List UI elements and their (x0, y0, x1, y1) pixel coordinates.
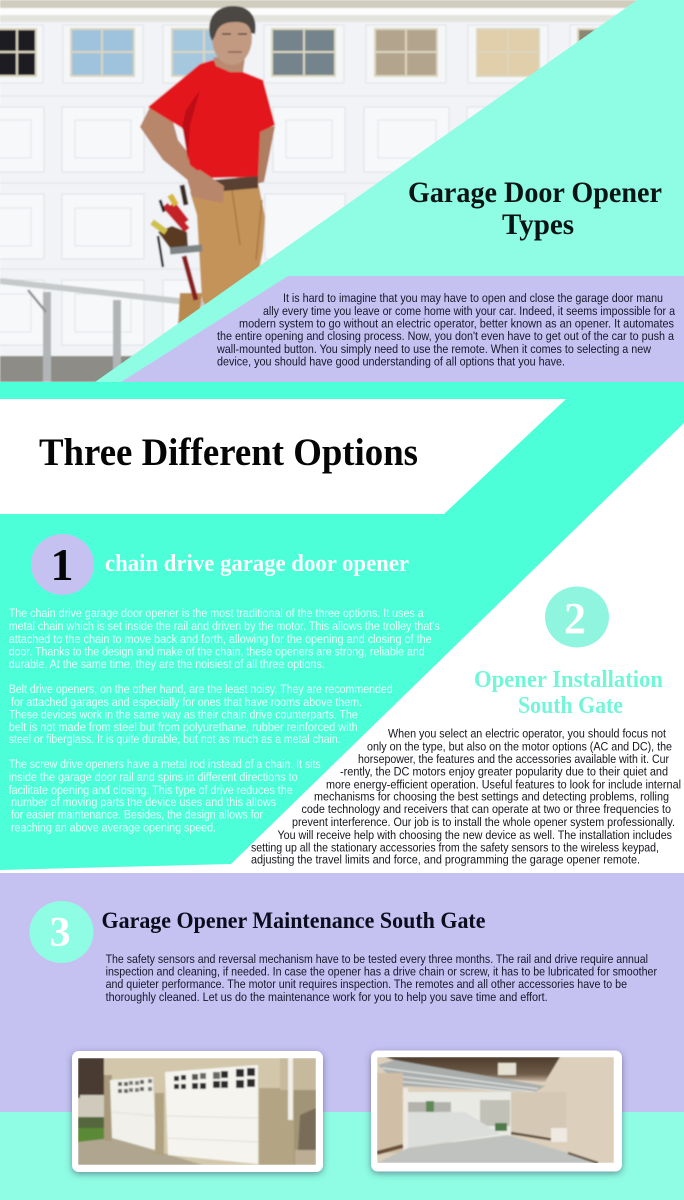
text block: chain, belt and screw drive descriptions: metal chain which is set inside the rail and driven by the motor. This allows the trolley that's (9, 619, 440, 633)
number badge 3 (30, 901, 94, 963)
panel: mint title triangle (95, 0, 684, 382)
text block: intro paragraph (216, 291, 675, 368)
text block: maintenance description (106, 952, 657, 1004)
panel: teal options background (0, 382, 684, 870)
text block: chain, belt and screw drive descriptions: for attached garages and especially for ones that have rooms above them. (11, 695, 362, 709)
heading: opener installation south gate: South Gate (518, 693, 623, 719)
text block: maintenance description: thoroughly cleaned. Let us do the maintenance work for you to help you save time and effort. (106, 990, 548, 1004)
title (408, 176, 662, 241)
panel: mint footer band (0, 1112, 684, 1200)
title: Types (502, 208, 574, 241)
number badge 2 (545, 586, 609, 648)
number badge 2: 2 (564, 594, 586, 643)
title: Garage Door Opener (408, 176, 662, 209)
heading: opener installation south gate: Opener Installation (474, 667, 663, 693)
heading: opener installation south gate (474, 667, 663, 719)
photo: white double garage doors (72, 1051, 323, 1172)
section 2: opener installation (251, 586, 681, 866)
sub: belt (213, 176, 258, 192)
sub: ladder (0, 281, 205, 382)
text block: chain, belt and screw drive descriptions: The screw drive openers have a metal rod instead of a chain. It sits (9, 757, 321, 771)
text block: chain, belt and screw drive descriptions: durable. At the same time, they are the noisiest of all three options. (9, 657, 325, 671)
text block: chain, belt and screw drive descriptions: Belt drive openers, on the other hand, are the least noisy. They are recommended (9, 682, 393, 696)
heading: three different options: Three Different Options (39, 431, 418, 474)
text block: chain, belt and screw drive descriptions: The chain drive garage door opener is the most traditional of the three options. It uses a (9, 606, 424, 620)
panel: white heading banner (0, 399, 566, 514)
text block: chain, belt and screw drive descriptions: number of moving parts the device uses and this allows (11, 795, 276, 809)
sub: man (140, 6, 275, 330)
text block: chain, belt and screw drive descriptions: attached to the chain to move back and forth, allowing for the opening and closing of the (9, 632, 432, 646)
number badge 1 (31, 534, 94, 595)
text block: chain, belt and screw drive descriptions: belt is not made from steel but from polyurethane, rubber reinforced with (9, 720, 358, 734)
text block: chain, belt and screw drive descriptions: facilitate opening and closing. This type of drive reduces the (9, 783, 293, 797)
text block: installation description (251, 726, 681, 866)
section 1: chain drive (9, 534, 440, 834)
text block: chain, belt and screw drive descriptions: These devices work in the same way as their chain drive counterparts. The (9, 708, 358, 722)
text block: chain, belt and screw drive descriptions (9, 606, 440, 834)
text block: intro paragraph: device, you should have good understanding of all options that you have. (217, 354, 565, 368)
panel: lavender intro (121, 276, 684, 382)
heading: chain drive garage door opener: chain drive garage door opener (105, 551, 409, 577)
text block: chain, belt and screw drive descriptions: reaching an above average opening speed. (11, 820, 216, 834)
sub: tool belt (152, 185, 202, 300)
text block: chain, belt and screw drive descriptions: steel or fiberglass. It is quite durable, but not as much as a metal chain. (9, 732, 341, 746)
text block: installation description: adjusting the travel limits and force, and programming the garage opener remote. (251, 852, 640, 866)
panel: lavender maintenance background (0, 873, 684, 1112)
text block: chain, belt and screw drive descriptions: inside the garage door rail and spins in different directions to (9, 770, 298, 784)
section 3: maintenance (30, 901, 657, 1004)
heading: garage opener maintenance south gate: Garage Opener Maintenance South Gate (102, 908, 486, 933)
text block: chain, belt and screw drive descriptions: for easier maintenance. Besides, the design allows for (11, 808, 263, 822)
text block: chain, belt and screw drive descriptions: door. Thanks to the design and make of the chain, these openers are strong, reliable and (9, 644, 425, 658)
number badge 3: 3 (50, 910, 70, 956)
panel: hero photo of man at garage door (0, 0, 684, 382)
photo: open garage interior (371, 1050, 622, 1172)
number badge 1: 1 (50, 539, 74, 590)
